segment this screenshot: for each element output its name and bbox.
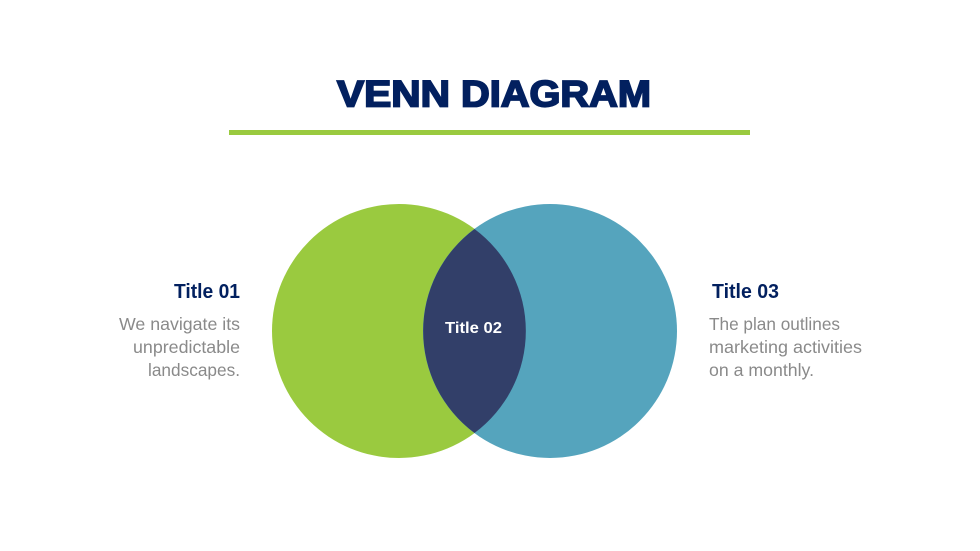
- body: left description: unpredictable: [133, 337, 240, 357]
- body: left description: We navigate its: [119, 314, 240, 334]
- left text block: [119, 281, 240, 380]
- body: right description: on a monthly.: [709, 360, 814, 380]
- body: left description: landscapes.: [148, 360, 240, 380]
- right text block: [709, 281, 862, 380]
- title: DIAGRAM: [461, 74, 651, 114]
- body: right description: [709, 314, 862, 380]
- heading: title 03: Title 03: [712, 281, 779, 303]
- body: right description: The plan outlines: [709, 314, 840, 334]
- body: left description: [119, 314, 240, 380]
- title: [337, 74, 651, 114]
- title underline: [229, 130, 750, 135]
- title: VENN: [337, 74, 450, 114]
- overlap lens: [423, 229, 526, 433]
- venn diagram: [272, 204, 677, 458]
- heading: title 01: Title 01: [174, 281, 240, 303]
- body: right description: marketing activities: [709, 337, 862, 357]
- overlap label: Title 02: [445, 320, 502, 337]
- circle: left green: [272, 204, 526, 458]
- circle: right blue: [423, 204, 677, 458]
